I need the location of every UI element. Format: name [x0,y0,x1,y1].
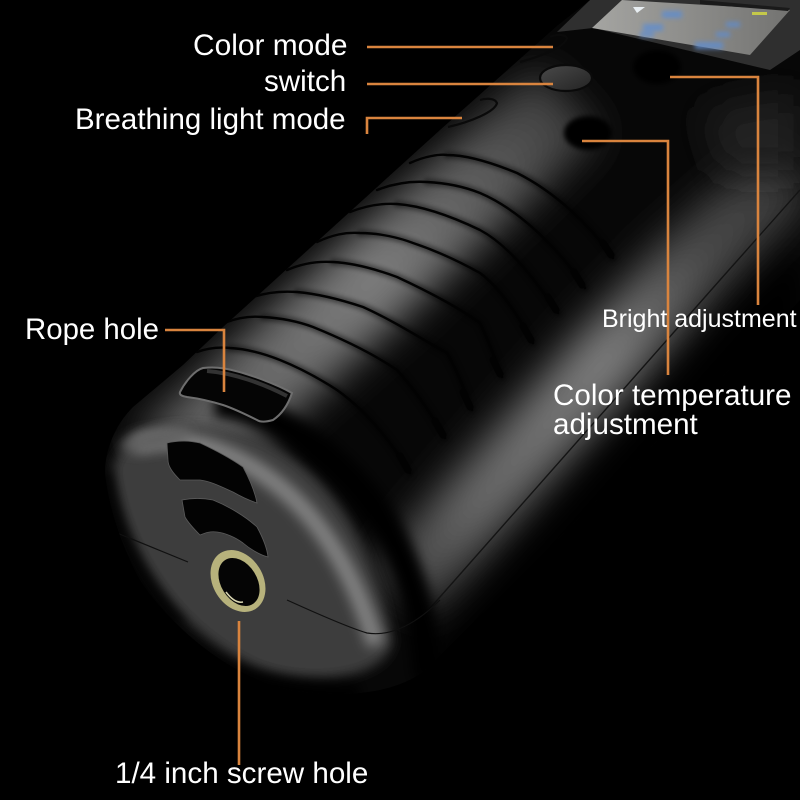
flashlight body [106,0,800,684]
lower edge falloff [420,250,800,800]
label: switch: switch [264,65,346,98]
vent slot 1 [167,441,257,503]
ribs [197,155,613,473]
label: screw hole: 1/4 inch screw hole [115,757,368,790]
button: color mode [520,35,567,62]
button: switch [540,65,592,91]
lower light band [400,170,790,590]
label: color temperature adjustment: Color temperature [553,379,792,412]
label: rope hole: Rope hole [25,313,159,346]
cap dark ridge [215,402,428,680]
rope hole [180,367,292,422]
vent slot 2 [182,498,268,557]
button: breathing light mode [448,99,497,127]
seam lines on cap [117,533,188,562]
leader line: rope hole [165,330,224,392]
button: bright adjustment [633,50,681,84]
button: color temperature adjustment [564,116,612,150]
seam along body [417,190,800,623]
leader line: color mode [367,46,553,48]
screen [592,0,790,55]
label: breathing light mode: Breathing light mode [75,103,346,136]
screw hole [199,540,277,622]
leader line: bright adjustment [670,77,758,305]
label: color temperature adjustment: adjustment [553,408,698,441]
rib band highlight [170,100,570,465]
leader line: color temperature adjustment [582,141,668,375]
leader line: switch [367,83,553,85]
screen bezel [557,0,800,70]
leader line: breathing light mode [367,118,462,134]
leader line: screw hole [238,621,240,765]
label: bright adjustment: Bright adjustment [602,305,797,333]
upper right dim shading [700,90,800,170]
cap face [106,424,392,695]
label: color mode: Color mode [193,29,348,62]
